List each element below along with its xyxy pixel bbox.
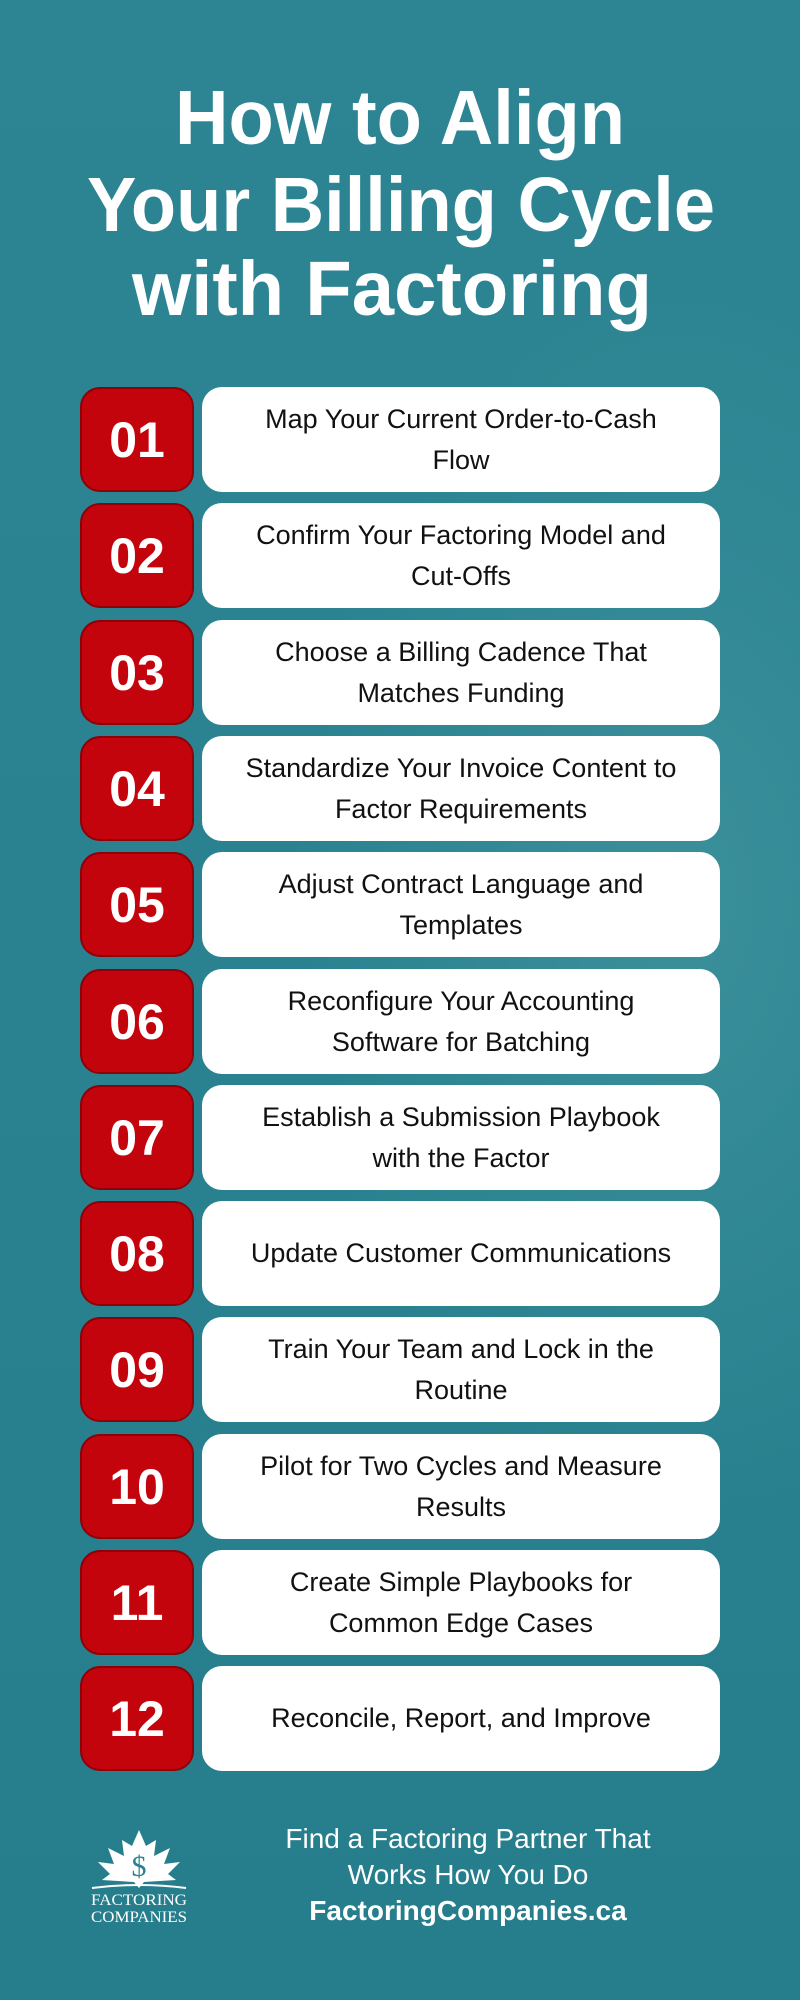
step 03 (80, 620, 720, 725)
step 12 (80, 1666, 720, 1771)
step 08: Update Customer Communications (251, 1238, 671, 1268)
step 09: 09 (109, 1342, 165, 1398)
logo (91, 1830, 187, 1926)
title: with Factoring (131, 246, 652, 332)
step 10: Results (416, 1492, 506, 1522)
step 03: 03 (109, 644, 165, 700)
step 07: 07 (109, 1110, 165, 1166)
step 01: Map Your Current Order-to-Cash (265, 404, 657, 434)
step 06: 06 (109, 994, 165, 1050)
title (87, 75, 715, 332)
step 07: Establish a Submission Playbook (262, 1102, 660, 1132)
step 09 (80, 1317, 720, 1422)
step 06: Software for Batching (332, 1026, 590, 1056)
step 01: 01 (109, 412, 165, 468)
step 09: Train Your Team and Lock in the (268, 1334, 654, 1364)
title: Your Billing Cycle (87, 162, 715, 248)
step 12: 12 (109, 1690, 165, 1746)
footer text: Find a Factoring Partner That (285, 1823, 651, 1854)
step 10 (80, 1434, 720, 1539)
step 07 (80, 1085, 720, 1190)
step 04: Standardize Your Invoice Content to (246, 752, 676, 782)
step 03: Matches Funding (357, 678, 565, 708)
step 08: 08 (109, 1226, 165, 1282)
logo: FACTORING (91, 1892, 187, 1909)
step 11: Create Simple Playbooks for (290, 1566, 632, 1596)
step 04 (80, 736, 720, 841)
step 04: 04 (109, 760, 165, 816)
step 12: Reconcile, Report, and Improve (271, 1703, 651, 1733)
step 02 (80, 503, 720, 608)
step 05 (80, 852, 720, 957)
step 02: 02 (109, 528, 165, 584)
logo: $ (132, 1850, 146, 1883)
footer text: Works How You Do (348, 1859, 588, 1890)
footer text: FactoringCompanies.ca (309, 1895, 627, 1926)
step 01: Flow (432, 444, 490, 474)
step 06 (80, 969, 720, 1074)
step 06: Reconfigure Your Accounting (288, 986, 634, 1016)
step 11: 11 (111, 1574, 163, 1630)
step 05: Adjust Contract Language and (279, 868, 643, 898)
step 10: 10 (109, 1458, 165, 1514)
step 07: with the Factor (372, 1142, 550, 1172)
step 11: Common Edge Cases (329, 1608, 593, 1638)
step 10: Pilot for Two Cycles and Measure (260, 1450, 662, 1480)
step 04: Factor Requirements (335, 794, 587, 824)
step 08 (80, 1201, 720, 1306)
step 11 (80, 1550, 720, 1655)
step 02: Confirm Your Factoring Model and (256, 520, 666, 550)
step 09: Routine (414, 1374, 508, 1404)
step 02: Cut-Offs (411, 560, 511, 590)
step 05: 05 (109, 876, 165, 932)
title: How to Align (175, 75, 625, 161)
step 05: Templates (399, 910, 523, 940)
logo: COMPANIES (91, 1909, 187, 1926)
step 01 (80, 387, 720, 492)
step 03: Choose a Billing Cadence That (275, 636, 647, 666)
footer text (285, 1823, 651, 1926)
